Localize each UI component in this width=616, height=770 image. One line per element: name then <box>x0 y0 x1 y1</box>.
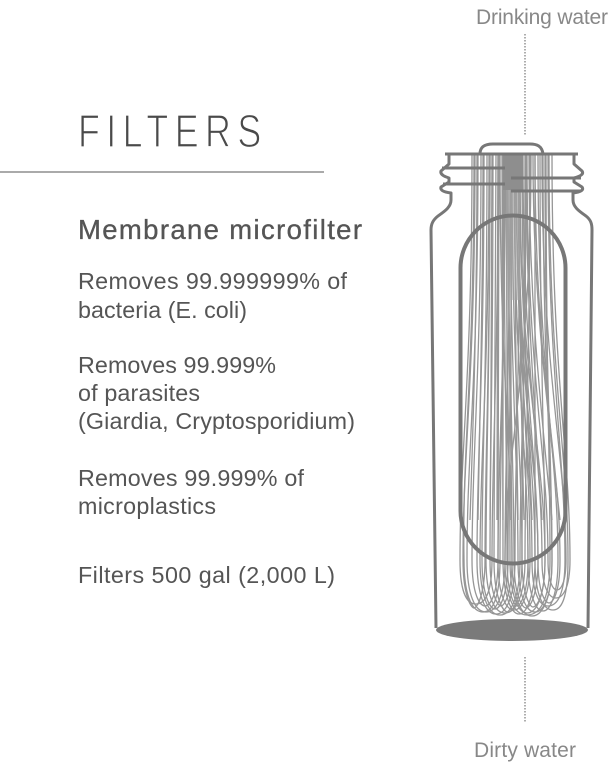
arrow: dirty water flow line <box>524 657 526 722</box>
text block: bacteria <box>78 268 348 323</box>
filter capsule <box>460 216 566 564</box>
label: drinking water: Drinking water <box>476 6 608 29</box>
bottle base <box>436 619 588 641</box>
text block: microplastics: microplastics <box>78 493 216 519</box>
icon: filter bottle <box>431 144 592 641</box>
arrow: clean water flow line <box>524 34 526 136</box>
text block: capacity: Filters 500 gal (2,000 L) <box>78 562 335 588</box>
label: dirty water: Dirty water <box>474 739 576 762</box>
text block: parasites <box>78 352 355 434</box>
text block: microplastics <box>78 465 305 519</box>
heading: membrane microfilter: Membrane microfilter <box>78 214 362 245</box>
text block: parasites: (Giardia, Cryptosporidium) <box>78 408 355 434</box>
text block: parasites: of parasites <box>78 380 200 406</box>
text block: parasites: Removes 99.999% <box>78 352 276 378</box>
bottle outline <box>431 144 592 628</box>
hollow fibers <box>460 155 570 616</box>
title: FILTERS <box>78 106 261 157</box>
dense fiber core <box>503 155 523 300</box>
text block: bacteria: bacteria (E. coli) <box>78 297 247 323</box>
text block: bacteria: Removes 99.999999% of <box>78 268 348 294</box>
text block: microplastics: Removes 99.999% of <box>78 465 305 491</box>
